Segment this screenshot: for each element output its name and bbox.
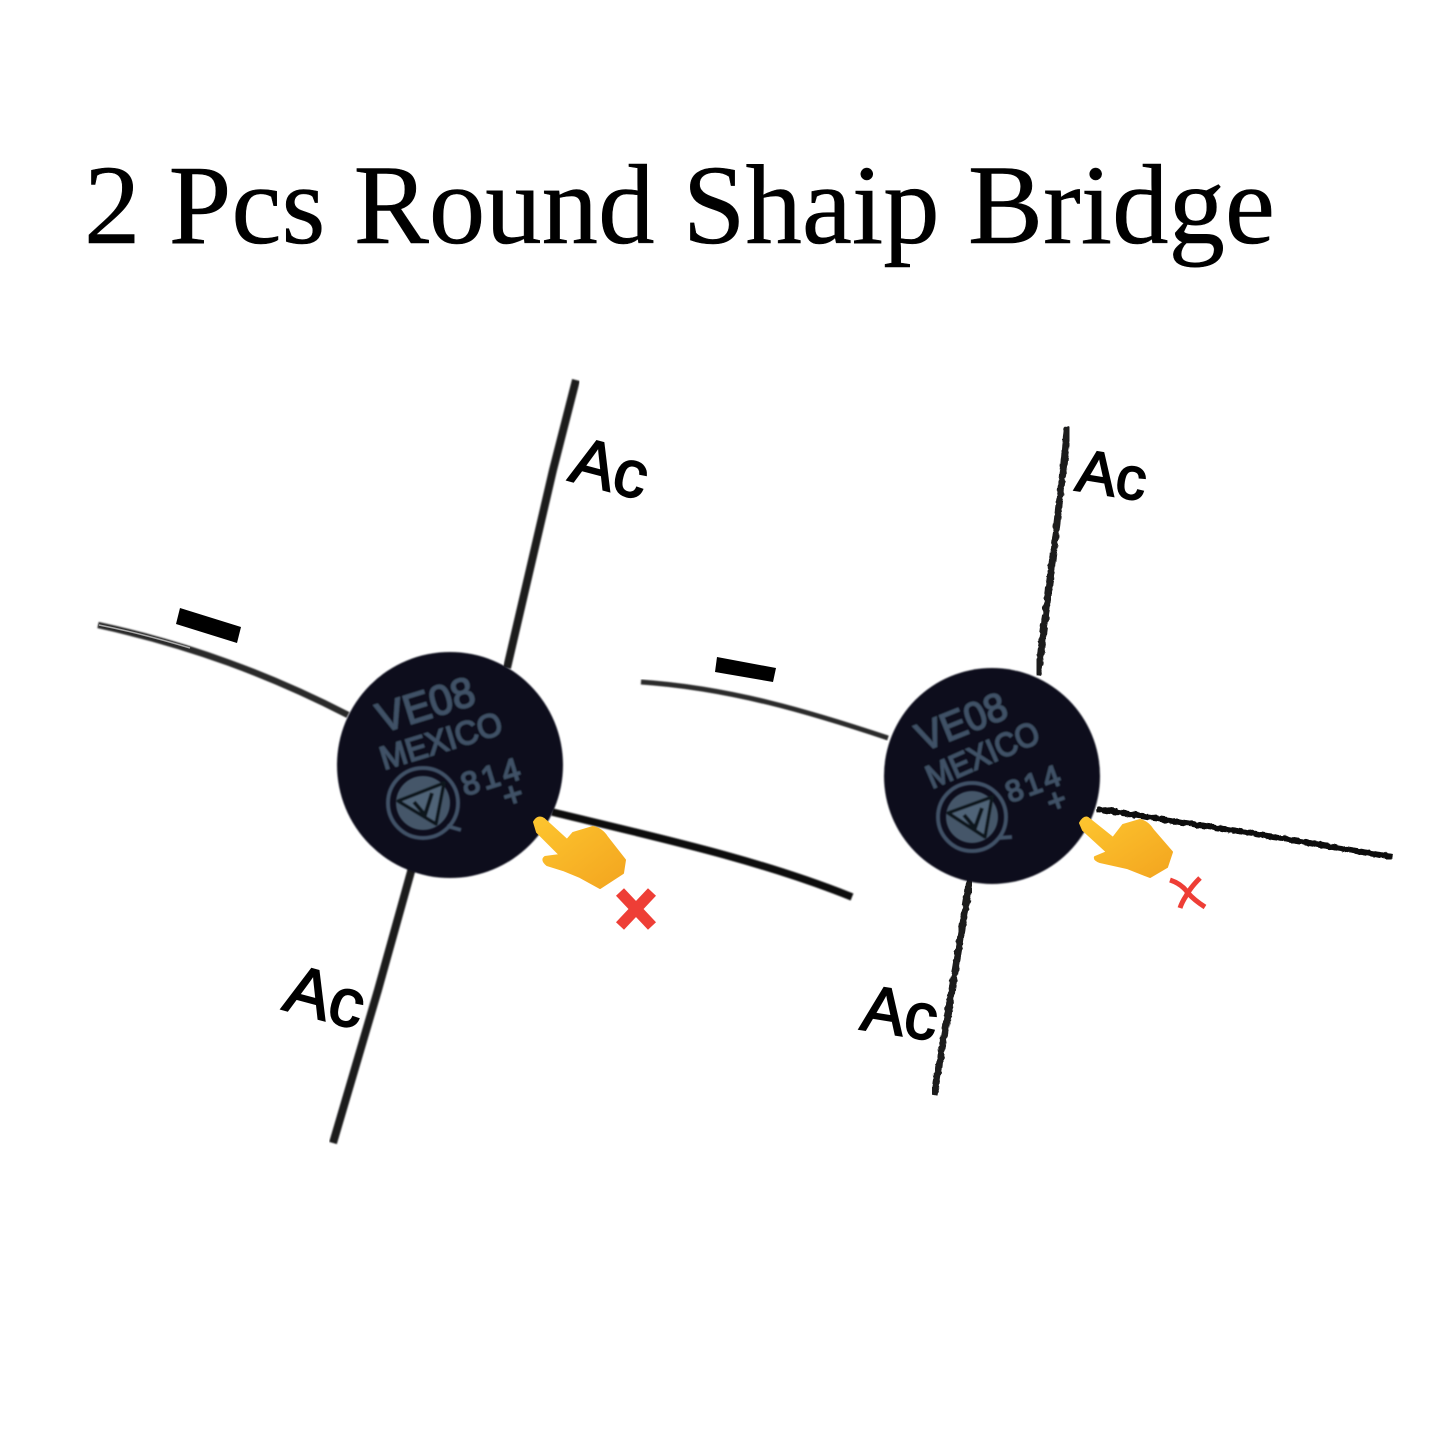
wire: left negative lead [98,625,348,715]
icon: right red cross [1170,878,1205,908]
wire: right top AC lead [1038,427,1068,675]
chip body: left: 814 [457,751,524,803]
chip body: left [337,652,563,878]
label: left bottom Ac: Ac [277,950,373,1044]
chip body: left: VE08 [371,667,480,742]
wire: left bottom AC lead [333,868,412,1143]
wire: right positive lead [1097,809,1392,857]
chip body: right: VE08 [910,684,1014,760]
label: left top Ac: Ac [563,422,657,513]
icon: left pointing hand [534,818,625,888]
icon: left red cross [620,892,652,926]
label: left minus [176,608,241,643]
icon: right pointing hand [1080,818,1172,877]
wire: right negative lead [641,682,888,738]
logo: left chip [388,768,461,838]
chip body: right: MEXICO [920,714,1045,795]
label: right bottom Ac: Ac [857,971,943,1055]
wire: right bottom AC lead [934,880,970,1095]
chip body: left: MEXICO [375,704,507,777]
chip body: right: 814 [1001,759,1065,810]
chip body: left: + [498,774,528,816]
wire: left top AC lead [507,380,576,668]
title: 2 Pcs Round Shaip Bridge [84,143,1275,268]
label: right minus [715,657,776,682]
label: right top Ac: Ac [1072,437,1152,514]
component: right round bridge [641,427,1392,1095]
chip body: right: + [1041,780,1071,820]
chip body: right [884,668,1100,884]
logo: right chip [938,783,1012,851]
component: left round bridge [98,380,852,1143]
wire: left positive lead [552,812,852,897]
